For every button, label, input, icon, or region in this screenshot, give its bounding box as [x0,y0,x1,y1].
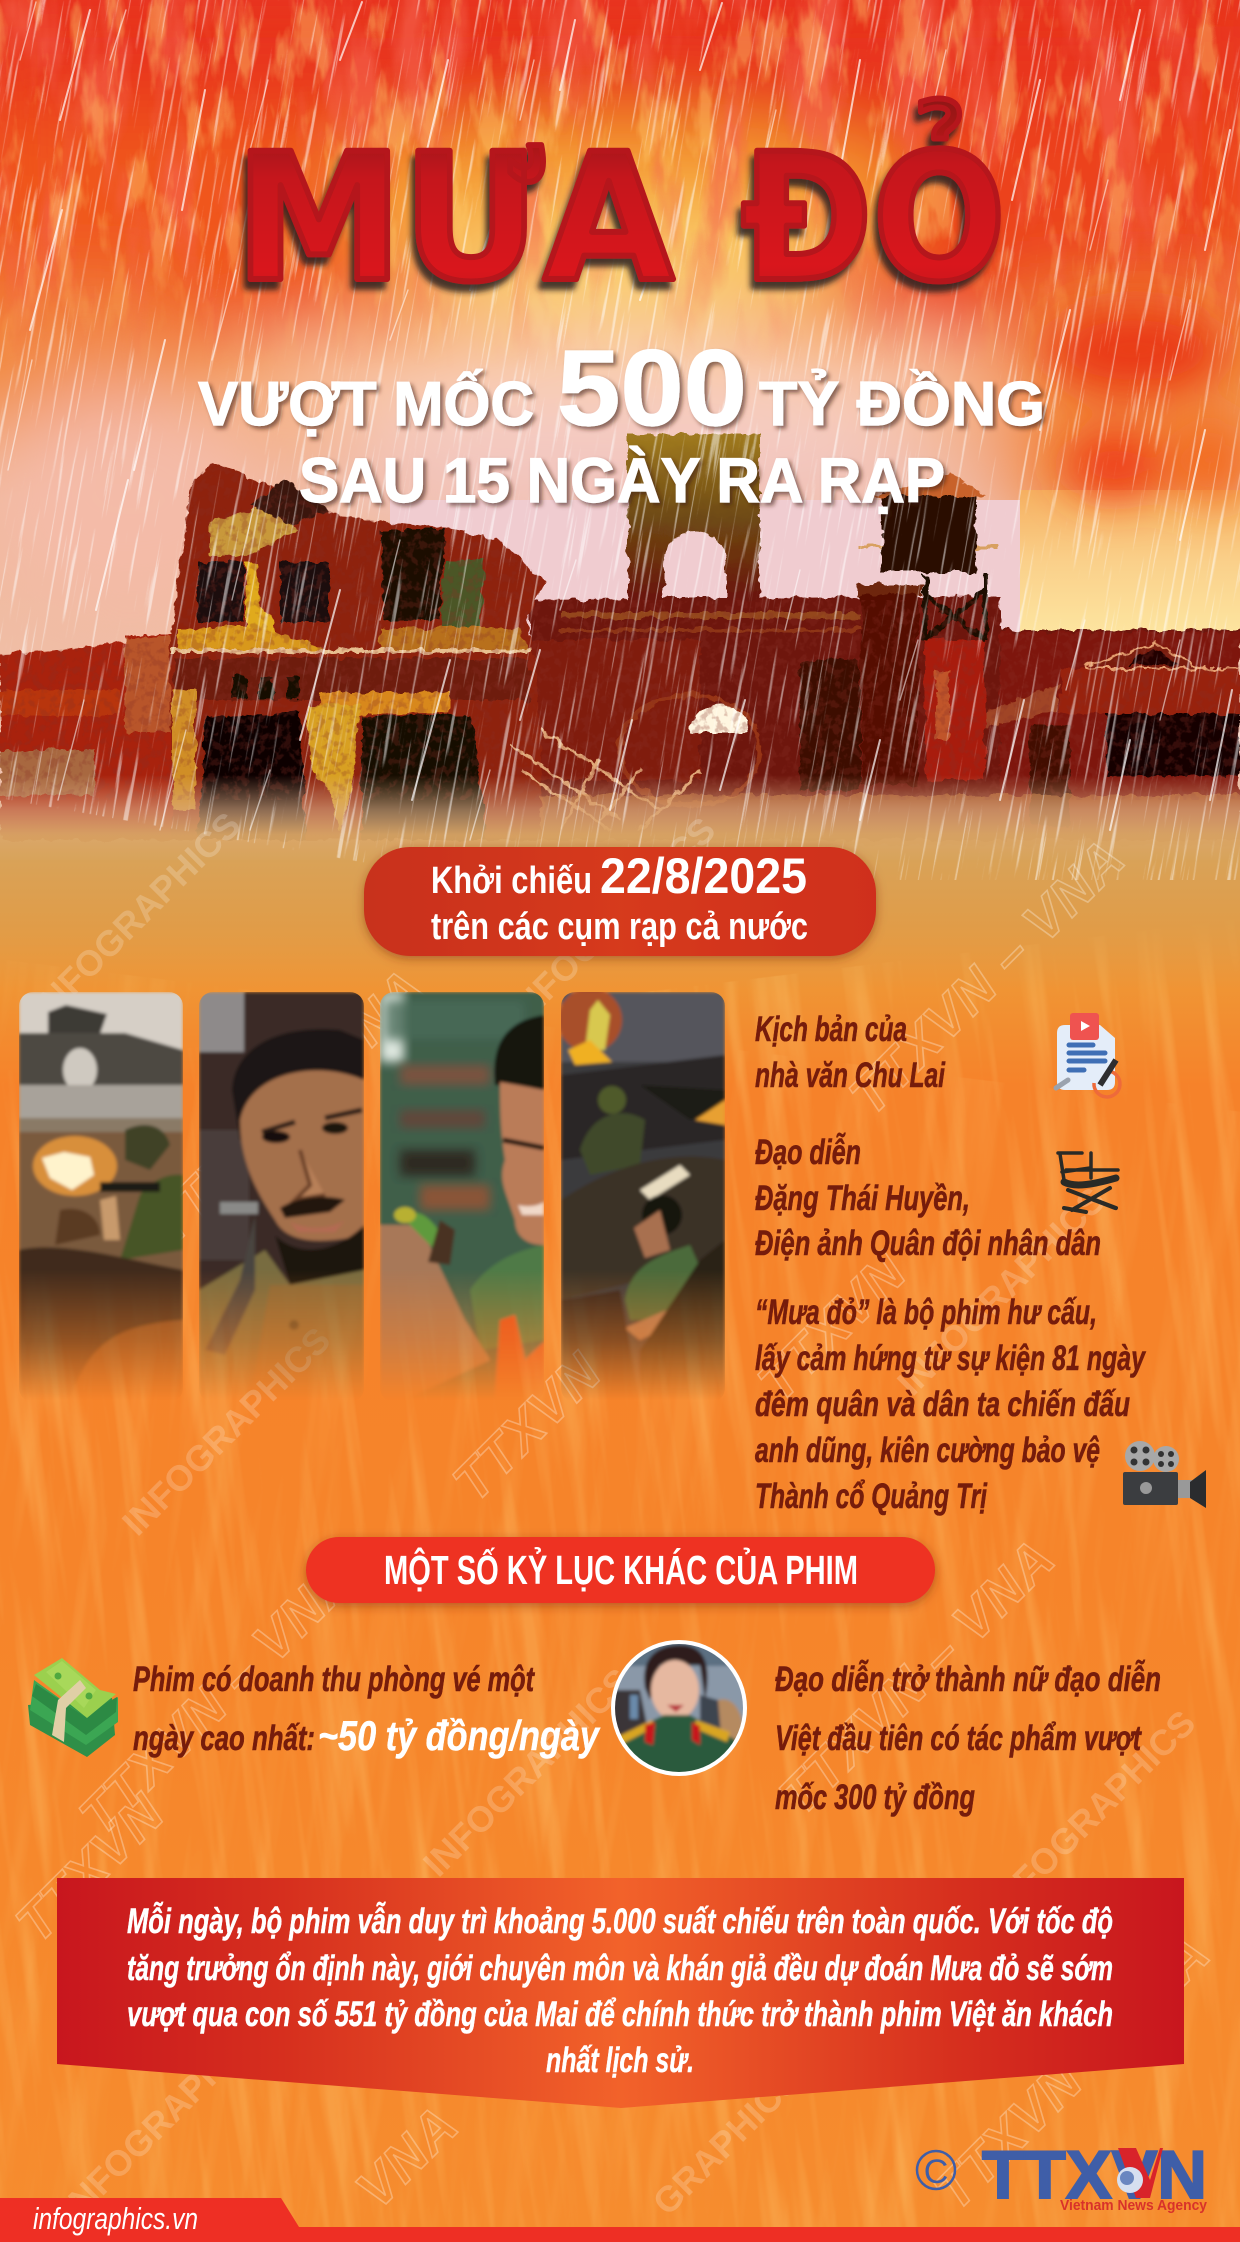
watermarks: TTXVN and INFOGRAPHICS: TTXVN – VNA [838,828,1136,1126]
pill: release date [364,847,876,956]
photo 3: soldier with bird [380,992,544,1402]
text block: film description: đêm quân và dân ta chiến đấu [755,1385,1130,1424]
pill: section heading: MỘT SỐ KỶ LỤC KHÁC CỦA PHIM [384,1547,858,1593]
background: lighter orange rain streaks [0,850,1240,2242]
text block: director [755,1132,1101,1263]
gate tower with arch [628,434,760,600]
ground fade and mist [0,775,1240,860]
watermarks: TTXVN and INFOGRAPHICS: INFOGRAPHICS [114,1319,338,1543]
text block: screenwriter [755,1010,946,1095]
text block: female director record: mốc 300 tỷ đồng [775,1778,975,1817]
burning gate arch light [690,704,748,733]
title: MƯA ĐỎ: MƯA [235,116,674,321]
footer band [0,2198,1240,2242]
logo: TTXVN Vietnam News Agency: Vietnam News Agency [1060,2197,1208,2214]
central wall [530,596,1240,840]
subtitle: vượt mốc 500 tỷ đồng sau 15 ngày ra rạp [198,327,1045,516]
rain over top section [0,0,1240,880]
text block: film description: “Mưa đỏ” là bộ phim hư cấu, [755,1293,1097,1332]
pill: release date: 22/8/2025 [600,848,807,904]
text block: box office record: ~50 tỷ đồng/ngày [318,1712,601,1759]
watermarks: TTXVN and INFOGRAPHICS: TTXVN – VNA [923,1923,1221,2221]
text block: film description: anh dũng, kiên cường bảo vệ [755,1431,1100,1470]
text block: director: Điện ảnh Quân đội nhân dân [755,1224,1101,1263]
title: MƯA ĐỎ: ĐỎ [741,97,1006,321]
watermarks: TTXVN and INFOGRAPHICS: TTXVN [5,1783,176,1954]
subtitle: vượt mốc 500 tỷ đồng sau 15 ngày ra rạp: SAU 15 NGÀY RA RẠP [299,446,945,516]
logo: TTXVN Vietnam News Agency: TTXVN [982,2137,1207,2213]
background: orange lower section [0,850,1240,2242]
watermarks: TTXVN and INFOGRAPHICS: GRAPHICS [644,2059,808,2223]
watermarks: TTXVN and INFOGRAPHICS: INFOGRAPHICS [499,809,723,1033]
pill: release date: Khởi chiếu [431,860,592,902]
watermarks: TTXVN and INFOGRAPHICS: TTXVN – VNA [768,1528,1066,1826]
watermarks: TTXVN and INFOGRAPHICS: INFOGRAPHICS [889,1179,1113,1403]
text block: screenwriter: nhà văn Chu Lai [755,1056,946,1095]
fort scene [0,434,1240,845]
watermarks: TTXVN and INFOGRAPHICS: TTXVN – VNA [68,1548,366,1846]
watch tower [858,473,998,785]
text block: film description [755,1293,1146,1516]
photo 2: soldier portrait [199,992,364,1402]
icon: director chair [1058,1153,1118,1212]
orange ground debris [539,792,1240,828]
text block: female director record [775,1659,1161,1817]
text block: box office record: Phim có doanh thu phòng vé một [133,1660,535,1699]
icon: film camera [1123,1441,1206,1508]
subtitle: vượt mốc 500 tỷ đồng sau 15 ngày ra rạp: VƯỢT MỐC [198,370,534,439]
right barracks [986,629,1240,808]
watermarks: TTXVN and INFOGRAPHICS: INFOGRAPHICS [979,1702,1203,1926]
subtitle: vượt mốc 500 tỷ đồng sau 15 ngày ra rạp: 500 [557,327,747,448]
logo: copyright symbol [917,2151,955,2191]
background: burning sky [0,0,1240,880]
watermarks: TTXVN and INFOGRAPHICS: INFOGRAPHICS [24,804,248,1028]
callout: red summary box [57,1878,1184,2108]
icon: stack of money [28,1658,118,1757]
sky: pale pink behind fort [390,500,1020,640]
text block: box office record: ngày cao nhất: [133,1719,315,1758]
sky: right orange and yellow glow [1020,305,1240,635]
watermarks: TTXVN and INFOGRAPHICS: INFOGRAPHICS [53,2004,277,2228]
watermarks: TTXVN and INFOGRAPHICS: TTXVN [442,1342,613,1513]
photo 1: battle at citadel [19,992,183,1402]
portrait: director [610,1640,750,1780]
text block: film description: Thành cổ Quảng Trị [755,1477,988,1516]
pill: section heading [306,1537,935,1603]
text block: screenwriter: Kịch bản của [755,1010,907,1049]
collapsed scaffolding [510,730,700,830]
ruined main building [170,462,545,840]
watermarks: TTXVN and INFOGRAPHICS: INFOGRAPHICS [415,1660,639,1884]
watermarks: TTXVN and INFOGRAPHICS: VNA [345,2095,470,2220]
subtitle: vượt mốc 500 tỷ đồng sau 15 ngày ra rạp: TỶ ĐỒNG [759,370,1045,439]
photo 4: battlefield [558,988,725,1402]
text block: director: Đạo diễn [755,1132,861,1172]
footer text: website: infographics.vn [33,2201,198,2236]
watermarks: TTXVN and INFOGRAPHICS: TTXVN [747,1242,918,1413]
left low ruin [0,635,172,840]
icon: script document [1056,1013,1120,1097]
watermarks: TTXVN and INFOGRAPHICS [5,804,1221,2228]
watermarks: TTXVN and INFOGRAPHICS: TTXVN – VNA [138,958,436,1256]
logo: copyright symbol: C [924,2153,948,2191]
text block: director: Đặng Thái Huyền, [755,1179,970,1218]
text block: box office record [133,1660,601,1759]
title: MƯA ĐỎ [235,97,1006,321]
pill: release date: trên các cụm rạp cả nước [431,906,808,948]
callout: red summary box: nhất lịch sử. [546,2041,694,2080]
